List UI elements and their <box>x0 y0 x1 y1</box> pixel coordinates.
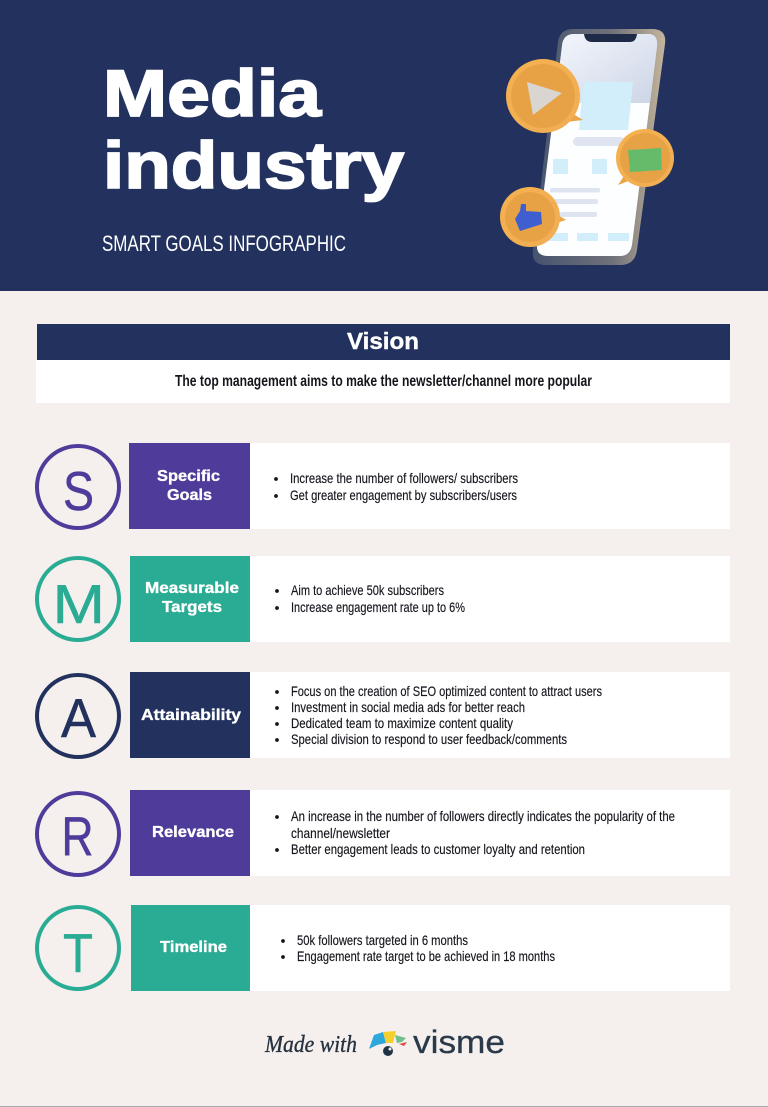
vision heading: Vision <box>347 328 419 354</box>
attainability details: Investment in social media ads for better reach <box>291 699 525 715</box>
relevance details: An increase in the number of followers directly indicates the popularity of the <box>291 808 675 824</box>
icon: phone with media bubbles <box>500 29 674 265</box>
icon: mail bubble <box>616 129 674 187</box>
icon: thumbs-up bubble <box>500 187 566 247</box>
visme wordmark: visme <box>413 1024 505 1060</box>
letter badge M <box>37 558 119 640</box>
letter badge R: R <box>62 805 94 867</box>
label box: Timeline <box>160 939 227 956</box>
header band <box>0 0 768 291</box>
target details: Increase engagement rate up to 6% <box>291 599 465 615</box>
label box: Goals <box>167 487 212 504</box>
title <box>103 56 404 202</box>
panel: specific goals <box>37 443 730 529</box>
attainability details <box>250 672 730 758</box>
attainability details: Dedicated team to maximize content quality <box>291 715 513 731</box>
subtitle: SMART GOALS INFOGRAPHIC <box>102 231 346 256</box>
title: industry <box>103 128 404 202</box>
letter badge A <box>37 675 119 757</box>
icon: play bubble <box>506 59 583 133</box>
target details: Aim to achieve 50k subscribers <box>291 582 444 598</box>
label box <box>131 905 250 991</box>
vision statement: The top management aims to make the newsletter/channel more popular <box>175 373 592 390</box>
goal details: Get greater engagement by subscribers/users <box>290 487 517 503</box>
made with text: Made with <box>264 1032 357 1058</box>
timeline details: Engagement rate target to be achieved in 18 months <box>297 948 555 964</box>
letter badge M: M <box>52 573 105 635</box>
goal details: Increase the number of followers/ subscribers <box>290 470 518 486</box>
attainability details: Special division to respond to user feedback/comments <box>291 731 567 747</box>
attainability details: Focus on the creation of SEO optimized content to attract users <box>291 683 602 699</box>
icon: visme logo <box>369 1031 407 1056</box>
panel: attainability <box>37 672 730 758</box>
target details <box>250 556 730 642</box>
panel: vision <box>36 324 730 403</box>
panel: timeline <box>37 905 730 991</box>
relevance details: Better engagement leads to customer loyalty and retention <box>291 841 585 857</box>
label box: Attainability <box>141 707 241 724</box>
title: Media <box>103 56 323 130</box>
letter badge A: A <box>61 687 96 749</box>
panel: measurable targets <box>37 556 730 642</box>
label box <box>130 790 250 876</box>
label box <box>129 443 250 529</box>
label box: Relevance <box>152 824 234 841</box>
footer: made with visme <box>264 1024 505 1060</box>
letter badge S <box>37 446 119 528</box>
goal details <box>250 443 730 529</box>
timeline details: 50k followers targeted in 6 months <box>297 932 468 948</box>
label box: Specific <box>157 468 220 485</box>
letter badge R <box>37 793 119 875</box>
letter badge T <box>37 907 119 989</box>
letter badge S: S <box>63 460 94 522</box>
panel: relevance <box>37 790 730 876</box>
letter badge T: T <box>63 922 93 984</box>
label box <box>130 672 250 758</box>
timeline details <box>250 905 730 991</box>
label box: Measurable <box>145 580 239 597</box>
label box: Targets <box>162 599 222 616</box>
label box <box>130 556 250 642</box>
relevance details: channel/newsletter <box>291 825 390 841</box>
relevance details <box>250 790 730 876</box>
phone body <box>533 29 665 265</box>
